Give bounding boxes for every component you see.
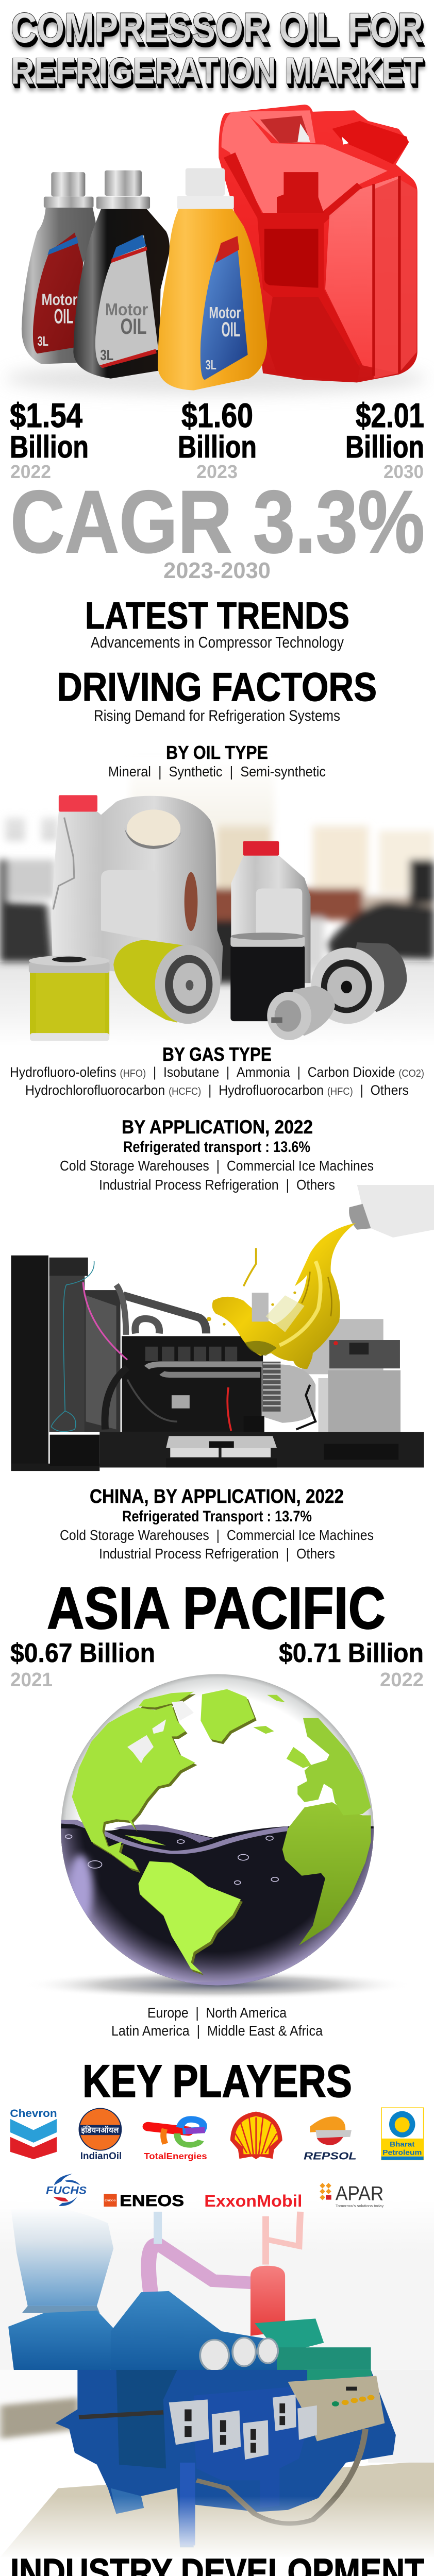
logo: TotalEnergies: [144, 2119, 207, 2162]
logo: IndianOil: IndianOil: [80, 2150, 122, 2162]
icon: yellow spin-on filter: [113, 940, 220, 1024]
icon: black oil filter: [230, 933, 305, 1021]
icon: gray motor oil bottle: 3L: [37, 334, 48, 349]
icon: black motor oil bottle: 3L: [100, 347, 113, 364]
text: regions list: Europe | North America: [147, 2005, 287, 2021]
logo: ENEOS: ENEOS: [120, 2192, 184, 2210]
icon: black motor oil bottle: OIL: [121, 314, 147, 339]
logo: ENEOS: ENEOS: [105, 2199, 116, 2202]
icon: black motor oil bottle: [73, 171, 170, 379]
continent: shadows: [74, 1691, 257, 1975]
title: [11, 5, 423, 92]
text: application list: [60, 1158, 374, 1193]
icon: oil jug pouring: [349, 1185, 434, 1238]
logos: key players: [10, 2108, 424, 2210]
text: oil types: Mineral | Synthetic | Semi-synthetic: [108, 764, 326, 779]
stat: Asia Pacific 2021: 2021: [10, 1669, 53, 1691]
continent: South America: [138, 1861, 241, 1973]
logo: Shell: [230, 2112, 282, 2159]
icon: yellow motor oil bottle: Motor: [209, 303, 241, 321]
logo: APAR: [320, 2182, 384, 2208]
stat: 2023 market size: Billion: [178, 430, 257, 464]
stat: 2022 market size: [10, 396, 89, 482]
engine and generator set: [11, 1256, 424, 1471]
logo: Chevron: Chevron: [10, 2108, 57, 2120]
heading: by gas type: BY GAS TYPE: [162, 1044, 272, 1065]
logo: APAR: APAR: [336, 2182, 383, 2205]
stat: Asia Pacific 2021: $0.67 Billion: [10, 1638, 155, 1668]
stat: Asia Pacific 2022: [279, 1638, 424, 1691]
logo: APAR: Tomorrow's solutions today: [336, 2204, 384, 2208]
icon: gray motor oil bottle: Motor: [42, 291, 78, 309]
stat: Asia Pacific 2021: [10, 1638, 155, 1691]
icon: yellow motor oil bottle: 3L: [205, 357, 216, 372]
logo: Bharat Petroleum: Petroleum: [382, 2149, 422, 2157]
logo: ExxonMobil: ExxonMobil: [204, 2192, 302, 2210]
icon: gray motor oil bottle: [22, 172, 97, 364]
icon: small gray bottle: [231, 841, 311, 983]
stat: 2022 market size: 2022: [10, 461, 51, 482]
text: China application list: Industrial Process Refrigeration | Others: [99, 1546, 335, 1562]
text: refrigerated transport share: Refrigerated transport : 13.6%: [123, 1139, 310, 1156]
text: China refrigerated transport share: Refrigerated Transport : 13.7%: [122, 1508, 312, 1525]
logo: IndianOil: [79, 2108, 122, 2162]
text: gas types line 1: Hydrofluoro-olefins (HFO) | Isobutane | Ammonia | Carbon Dioxide (CO2): [10, 1064, 424, 1080]
oil containers and filters photo: [0, 757, 434, 1046]
logo: IndianOil: इंडियनऑयल: [80, 2125, 119, 2134]
heading: by application: BY APPLICATION, 2022: [122, 1116, 313, 1138]
logo: FUCHS: FUCHS: [46, 2184, 87, 2197]
logo: FUCHS: [46, 2174, 87, 2206]
logo: Bharat Petroleum: Bharat: [390, 2141, 414, 2148]
text: application list: Industrial Process Refrigeration | Others: [99, 1177, 335, 1193]
continent: Europe: [297, 1718, 371, 1815]
text: regions list: Latin America | Middle East & Africa: [111, 2023, 323, 2039]
stat: Asia Pacific 2022: $0.71 Billion: [279, 1638, 424, 1668]
hero illustration: oil bottles and red jerry can: [6, 105, 426, 394]
compressor photo upper part: [0, 2200, 434, 2371]
heading: Asia Pacific: ASIA PACIFIC: [47, 1575, 386, 1641]
text: China application list: [60, 1527, 374, 1562]
heading: China by application: CHINA, BY APPLICATION, 2022: [90, 1486, 344, 1507]
globe half filled with oil: [54, 1674, 381, 1997]
continent: North America and Greenland: [72, 1689, 255, 1871]
continent: Africa: [282, 1802, 371, 1945]
stat: 2023 market size: [178, 396, 257, 482]
heading: driving factors: DRIVING FACTORS: [57, 664, 377, 709]
text: application list: Cold Storage Warehouses | Commercial Ice Machines: [60, 1158, 374, 1174]
icon: large gray canister: [51, 795, 223, 983]
stat: 2022 market size: Billion: [10, 430, 89, 464]
text: driving factor: Rising Demand for Refrigeration Systems: [94, 707, 340, 724]
stat: 2022 market size: $1.54: [10, 396, 82, 434]
heading: by oil type: BY OIL TYPE: [166, 742, 268, 763]
blurred workshop background: [0, 757, 434, 1046]
icon: gray motor oil bottle: OIL: [54, 305, 73, 328]
stat: 2023 market size: 2023: [196, 461, 238, 482]
stat: 2023 market size: $1.60: [181, 396, 253, 434]
logo: TotalEnergies: TotalEnergies: [144, 2151, 207, 2162]
logo: Repsol: REPSOL: [304, 2150, 357, 2162]
icon: gray spin-on filter: [311, 942, 407, 1024]
text: latest trend: Advancements in Compressor Technology: [91, 633, 344, 651]
stat: 2030 market size: 2030: [383, 461, 424, 482]
icon: red jerry can: [219, 105, 418, 382]
CAGR period: 2023-2030: [163, 558, 271, 583]
continent: Hudson Bay gap: [127, 1735, 154, 1763]
heading: key players: KEY PLAYERS: [82, 2055, 352, 2107]
logo: Repsol: [304, 2116, 357, 2162]
icon: black motor oil bottle: Motor: [105, 300, 148, 319]
stat: Asia Pacific 2022: 2022: [380, 1669, 424, 1691]
oil fill: [55, 1820, 376, 1991]
text: gas types line 2: Hydrochlorofluorocarbon (HCFC) | Hydrofluorocarbon (HFC) | Others: [25, 1082, 409, 1098]
continent: Arctic gaps: [152, 1701, 194, 1734]
compressor photo lower part: [0, 2370, 434, 2561]
icon: yellow motor oil bottle: [158, 168, 267, 391]
icon: yellow motor oil bottle: OIL: [222, 318, 240, 341]
logo: Bharat Petroleum: [381, 2108, 424, 2160]
logo: Chevron: [10, 2108, 57, 2159]
heading: latest trends: LATEST TRENDS: [85, 595, 349, 637]
text: regions list: [111, 2005, 323, 2039]
text: China application list: Cold Storage Warehouses | Commercial Ice Machines: [60, 1527, 374, 1543]
generator engine with pouring oil illustration: [11, 1185, 434, 1471]
icon: oil splash: [207, 1223, 356, 1369]
icon: yellow cartridge filter: [29, 956, 110, 1041]
continent: islands: [125, 1695, 311, 1845]
stat: 2030 market size: [345, 396, 424, 482]
icon: small silver fuel filter: [267, 986, 335, 1040]
